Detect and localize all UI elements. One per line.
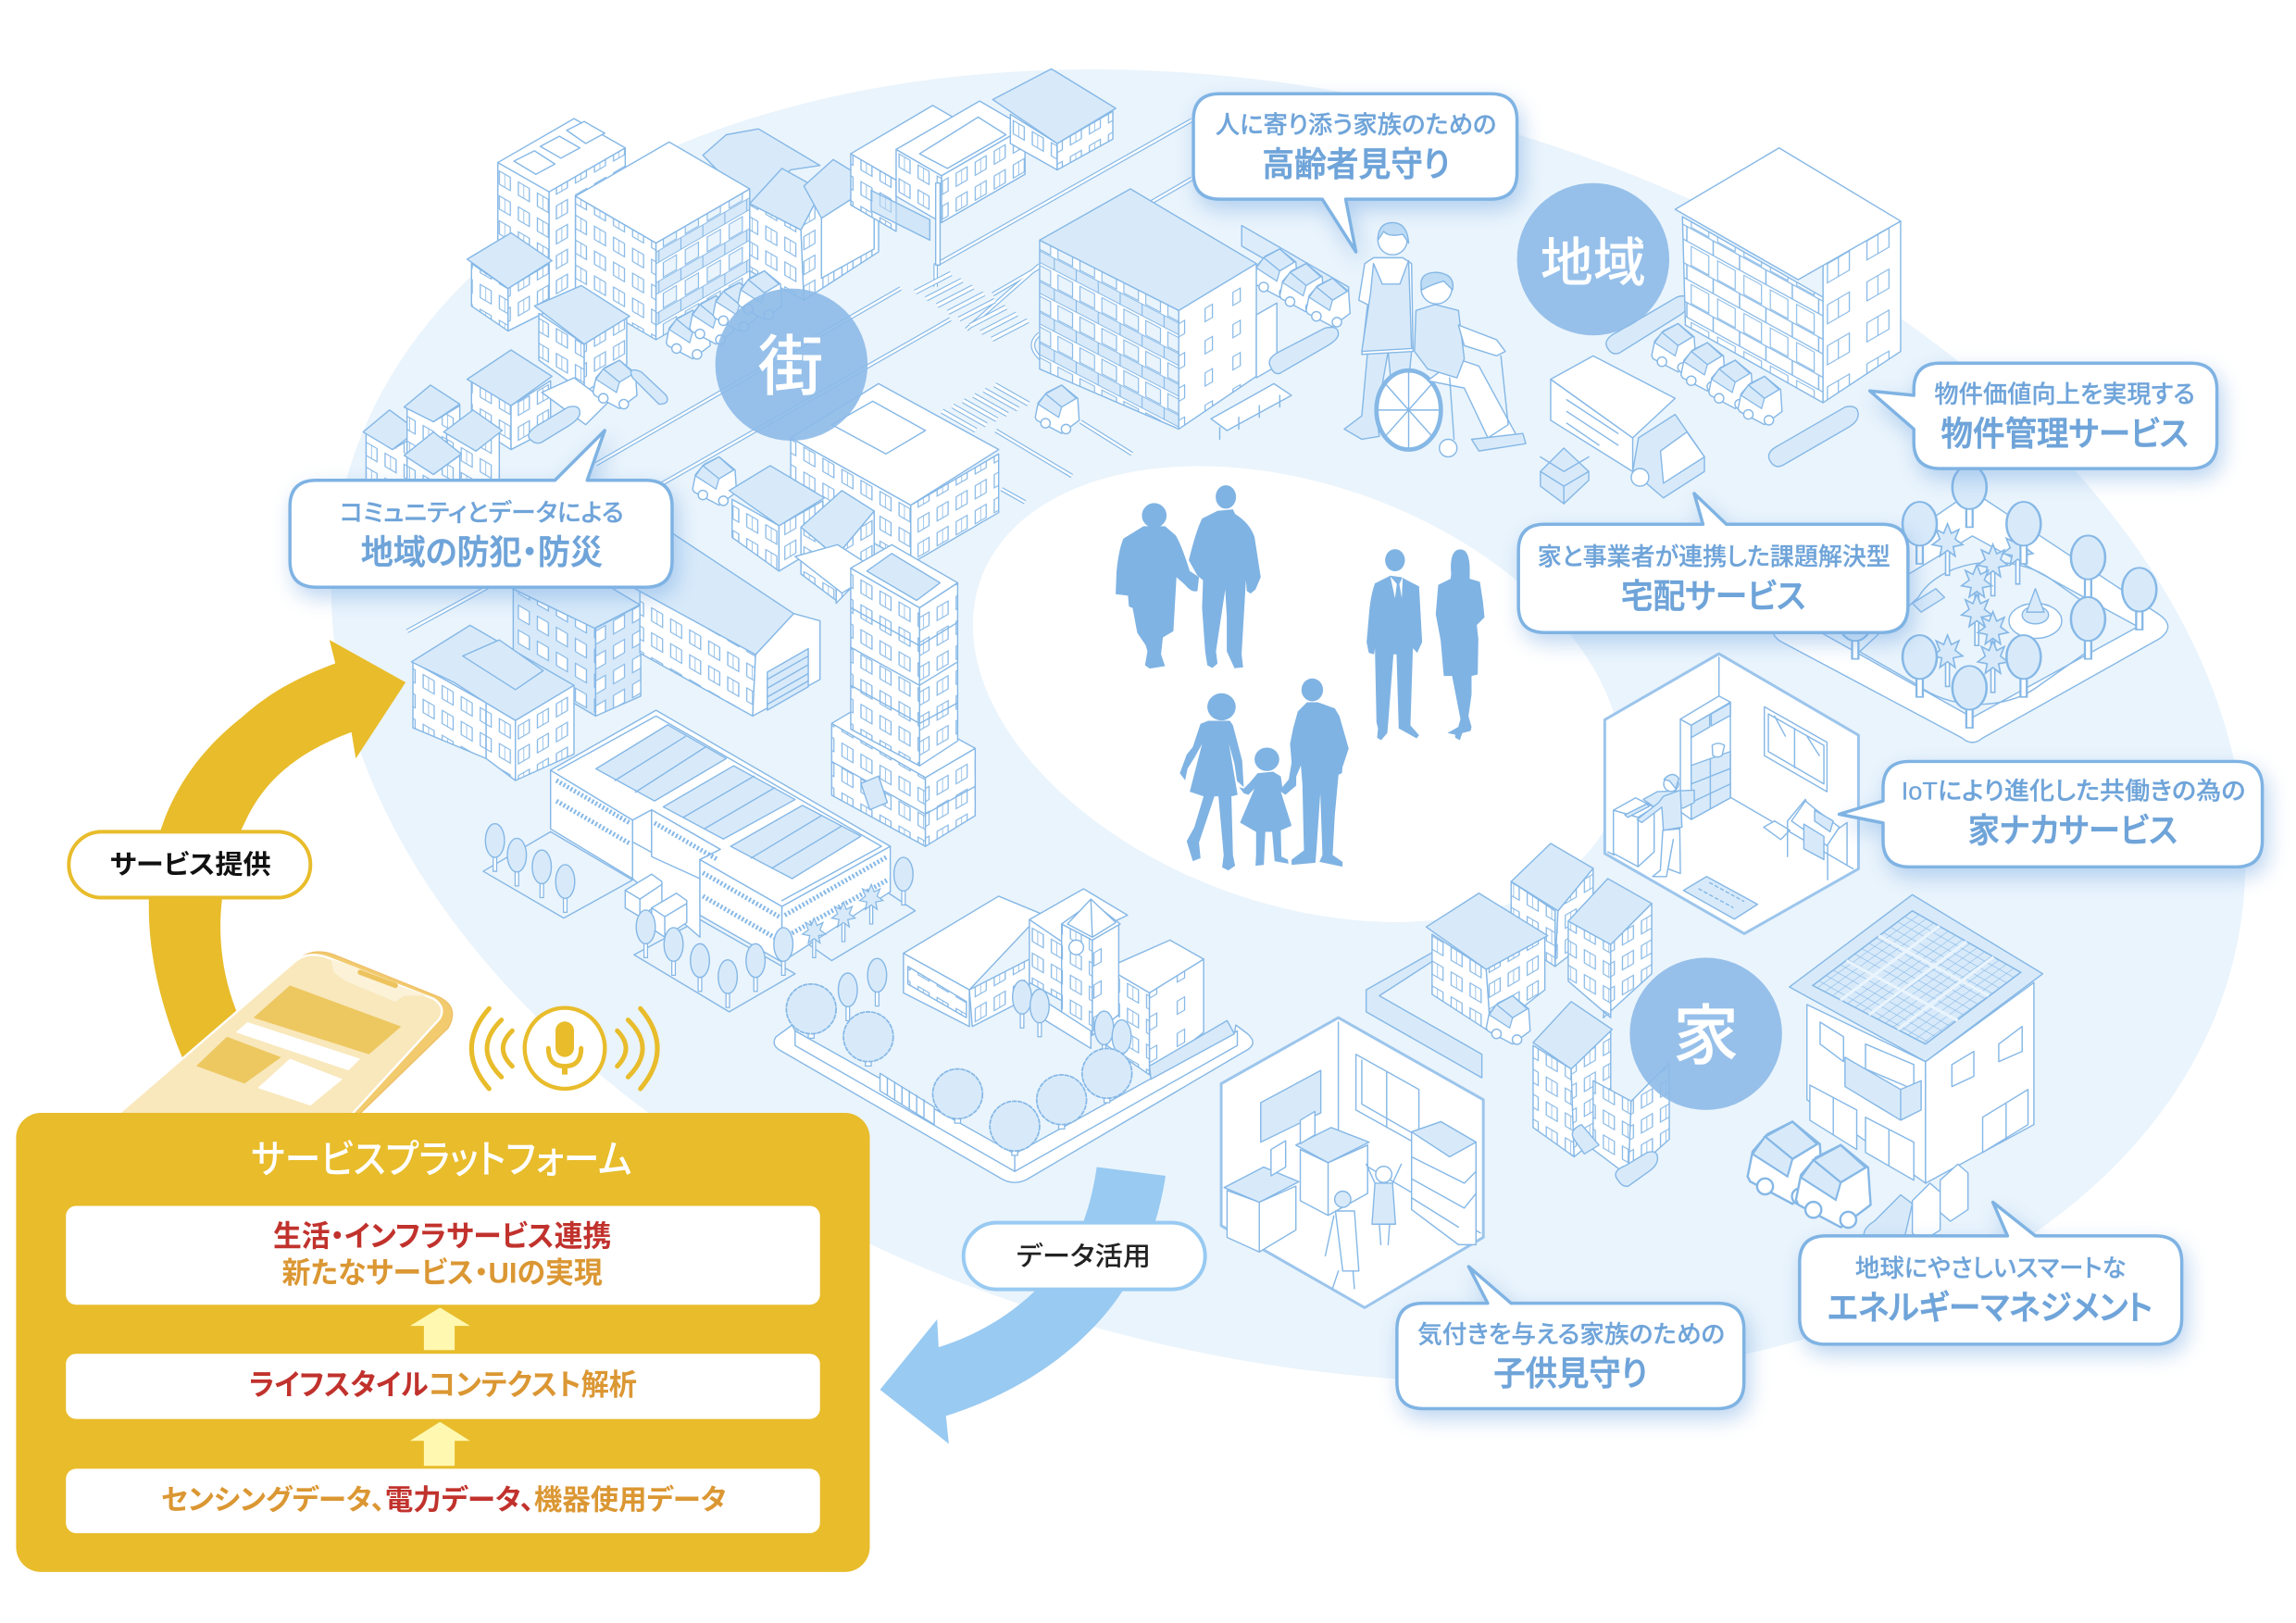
callout: elderly monitoring: 高齢者見守り [1262,145,1450,183]
district marker: town [716,289,867,441]
house cluster [1366,843,1669,1186]
arrow: data utilisation (blue) [880,1167,1166,1443]
apartment [1675,148,1901,403]
wheelchair user [1377,272,1526,456]
home district [1221,654,2042,1307]
pill: service delivery [69,831,310,898]
callout: in-home services [1840,761,2263,867]
district marker: region: 地域 [1541,234,1646,293]
solar panels [596,725,726,801]
silhouette: elderly couple [1116,485,1261,668]
platform tier: data sources: センシングデータ、電力データ、機器使用データ [161,1484,726,1517]
callout: energy management: 地球にやさしいスマートな [1855,1255,2127,1282]
arrow: up 1 [410,1307,470,1350]
callout: property management: 物件価値向上を実現する [1934,381,2195,408]
warehouse [630,531,820,716]
callout: property management: 物件管理サービス [1940,415,2189,453]
room: IoT co-working [1604,654,1858,933]
silhouettes of people [1116,485,1484,870]
building: two part block [411,625,574,780]
callout: delivery: 宅配サービス [1621,577,1805,615]
school gate [880,1073,934,1125]
platform tier: context analysis: ライフスタイルコンテクスト解析 [249,1367,637,1401]
platform tier: data sources [66,1468,820,1533]
building: apartment with balconies [576,142,750,340]
callout: delivery [1518,493,1908,632]
callout: community safety [290,431,672,587]
building: mid block [513,559,641,716]
building: rooftop units [498,119,625,309]
park with fountain [1773,466,2168,743]
tall tower [831,544,975,846]
factory with solar roof [483,710,916,1012]
pill: data utilisation: データ活用 [1017,1242,1151,1272]
panel: service platform [16,1113,869,1572]
solar panels grid [1813,911,2021,1044]
platform heading: サービスプラットフォーム [251,1138,631,1182]
district marker: region [1517,183,1669,335]
callout: child monitoring: 気付きを与える家族のための [1417,1320,1725,1348]
pill: service delivery: サービス提供 [110,850,271,880]
apartment block with parking [1040,189,1350,439]
parked vans [1652,324,1782,425]
callout: elderly monitoring [1193,94,1517,252]
town district buildings [363,69,1350,1182]
callout: energy management [1800,1203,2182,1344]
icon: microphone with sound waves [471,1008,657,1089]
road network [407,120,1192,631]
platform tier: services: 生活・インフラサービス連携 [273,1219,611,1253]
caregiver and wheelchair [1344,222,1526,456]
callout: community safety: コミュニティとデータによる [340,499,624,527]
platform tier: context analysis [66,1354,820,1419]
small houses [363,232,737,506]
delivery truck [1541,356,1704,504]
delivery trucks at factory [625,874,687,937]
arrow: up 2 [410,1422,470,1466]
callout: in-home services: 家ナカサービス [1968,811,2177,849]
top centre buildings [851,69,1116,265]
callout: in-home services: IoTにより進化した共働きの為の [1902,778,2245,805]
callout: energy management: エネルギーマネジメント [1828,1289,2152,1327]
callout: community safety: 地域の防犯・防災 [361,533,603,571]
district marker: home: 家 [1673,1001,1739,1074]
district marker: town: 街 [757,331,824,405]
arrow: service delivery (yellow) [149,640,406,1091]
callout: elderly monitoring: 人に寄り添う家族のための [1216,111,1496,139]
room: children's study [1221,1017,1483,1307]
silhouette: family [1179,679,1349,870]
school with courtyard [774,889,1253,1182]
callout: delivery: 家と事業者が連携した課題解決型 [1538,543,1890,571]
platform tier: services: 新たなサービス・UIの実現 [281,1255,603,1289]
parked vans [667,271,782,359]
callout: child monitoring: 子供見守り [1493,1355,1647,1392]
tree patch [483,831,632,918]
centre block with small houses [730,383,1079,604]
callout: child monitoring [1397,1267,1744,1409]
caregiver [1344,222,1413,439]
hedge [1606,296,1689,354]
district marker: home [1629,957,1782,1110]
platform tier: services [66,1205,820,1305]
platform rim [774,1025,1253,1182]
region district buildings [1541,148,2168,743]
callout: property management [1870,363,2217,468]
solar powered house [1748,894,2042,1242]
hedge [1768,406,1858,467]
houses behind [703,129,879,300]
icon: smartphone [103,952,453,1128]
silhouette: business people [1366,549,1484,740]
central white ellipse [909,382,1686,1006]
pill: data utilisation [964,1223,1205,1290]
